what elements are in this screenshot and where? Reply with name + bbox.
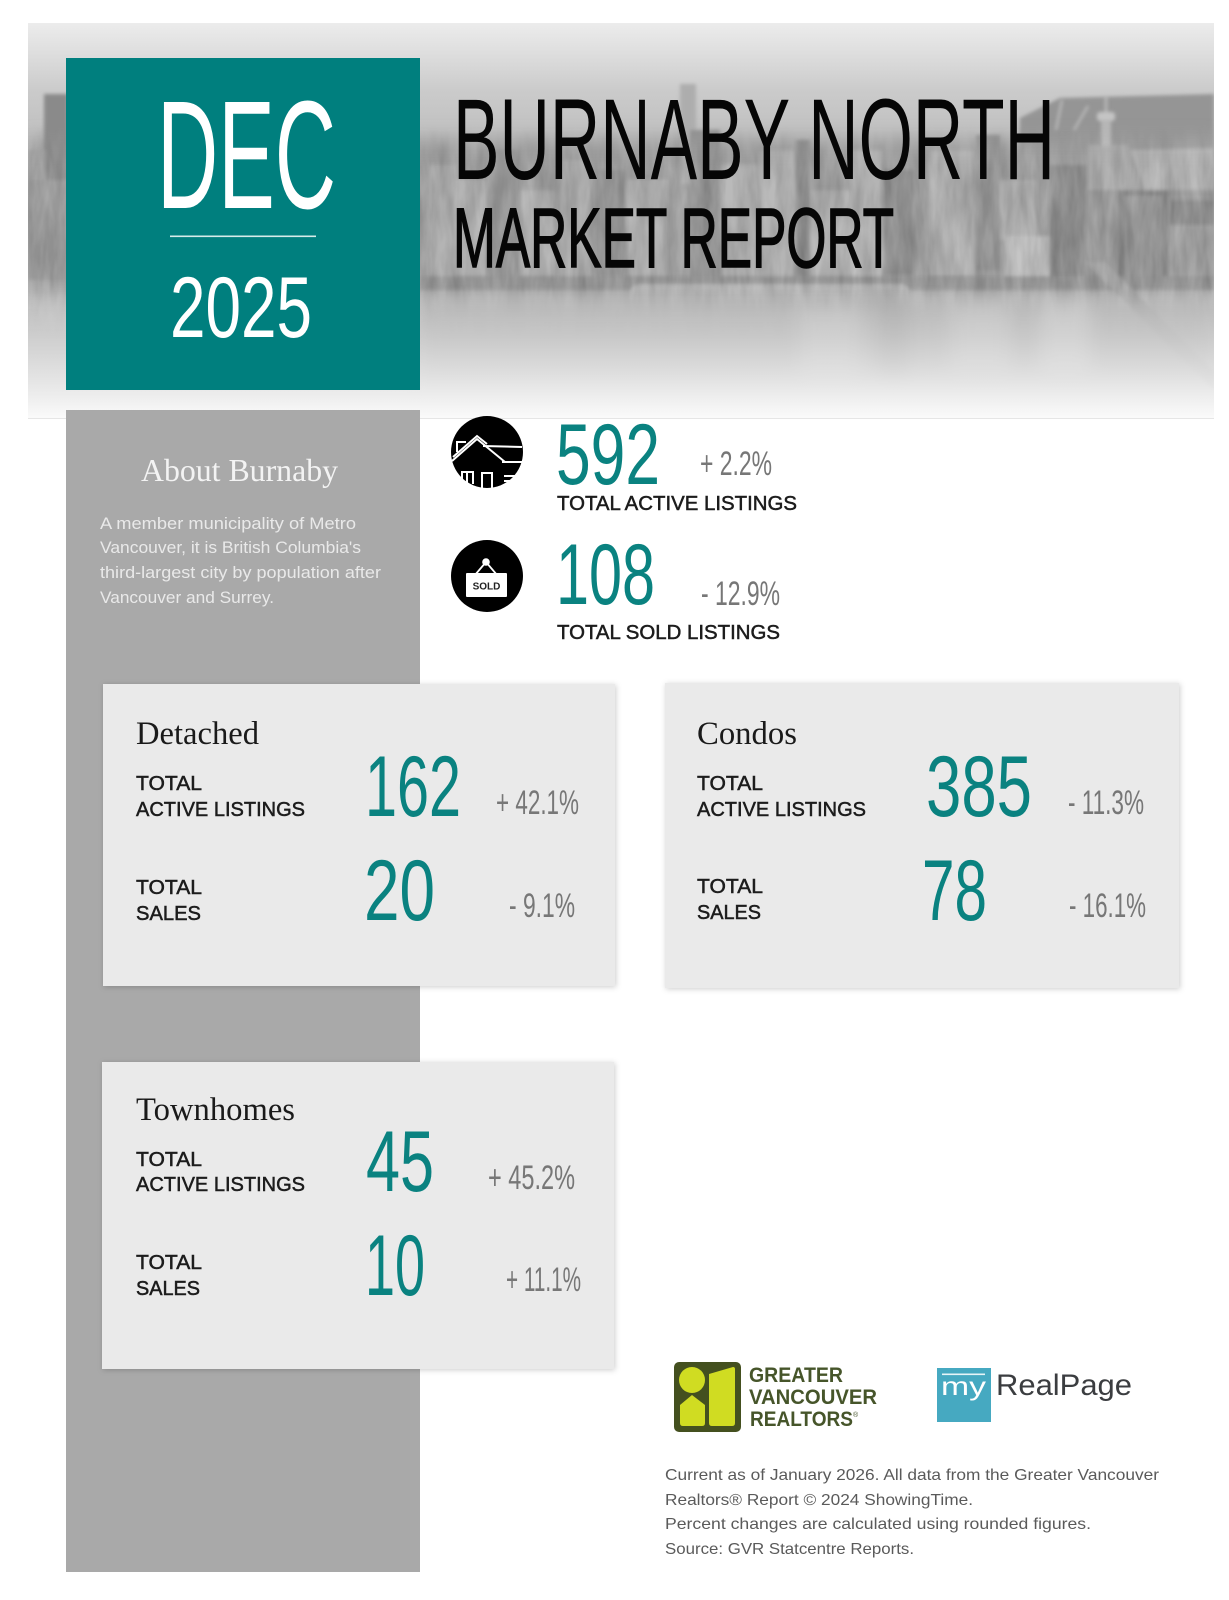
sidebar paragraph: Vancouver and Surrey.: [100, 589, 274, 607]
logo: myrealpage: [937, 1368, 1132, 1422]
footnote: Realtors® Report © 2024 ShowingTime.: [665, 1492, 973, 1509]
title line 2: MARKET REPORT: [453, 191, 894, 285]
icon: house: [451, 416, 523, 488]
header skyline photo banner: [28, 23, 1214, 419]
panel: townhomes: [102, 1062, 614, 1369]
icon: sold sign: SOLD: [473, 582, 500, 592]
condos sales change: - 16.1%: [1069, 887, 1146, 925]
condos listings label: [697, 773, 866, 821]
detached sales label: SALES: [136, 903, 201, 925]
townhomes listings label: [136, 1149, 305, 1196]
lookout tower: [1105, 96, 1107, 116]
detached sales label: [136, 877, 202, 925]
detached sales change: - 9.1%: [509, 887, 575, 925]
detached listings change: + 42.1%: [496, 784, 579, 822]
detached listings label: ACTIVE LISTINGS: [136, 799, 305, 821]
photo grain: [28, 140, 1214, 301]
footnote: Percent changes are calculated using rounded figures.: [665, 1516, 1091, 1533]
condos sales label: TOTAL: [697, 876, 763, 898]
sidebar paragraph: [100, 515, 382, 607]
city haze: [28, 140, 1214, 290]
condos heading: Condos: [697, 716, 797, 752]
month: DEC: [157, 69, 336, 241]
sidebar heading: About Burnaby: [141, 452, 338, 488]
sidebar paragraph: Vancouver, it is British Columbia's: [100, 539, 361, 557]
footnote: [665, 1467, 1160, 1558]
logo: myrealpage: my: [941, 1371, 986, 1401]
townhomes listings change: + 45.2%: [488, 1159, 575, 1197]
footnote: Source: GVR Statcentre Reports.: [665, 1541, 914, 1558]
left city mass: [48, 180, 66, 272]
sidebar paragraph: A member municipality of Metro: [100, 515, 356, 533]
value: 592: [556, 407, 660, 503]
detached listings label: TOTAL: [136, 773, 202, 795]
detached sales value: 20: [364, 843, 435, 939]
condos listings change: - 11.3%: [1068, 784, 1144, 822]
label: TOTAL SOLD LISTINGS: [557, 622, 780, 644]
townhomes sales label: TOTAL: [136, 1252, 202, 1274]
sidebar paragraph: third-largest city by population after: [100, 564, 382, 582]
townhomes listings value: 45: [366, 1114, 434, 1210]
logo: greater vancouver realtors: REALTORS: [750, 1408, 853, 1431]
condos listings label: TOTAL: [697, 773, 763, 795]
date panel: [66, 58, 420, 390]
townhomes sales label: [136, 1252, 202, 1300]
shoreline: [420, 276, 1214, 290]
detached heading: Detached: [136, 716, 259, 752]
stat: total sold listings: [556, 527, 780, 644]
panel: condos: [665, 683, 1179, 988]
condos listings value: 385: [926, 739, 1032, 835]
title: [453, 76, 1055, 285]
label: TOTAL ACTIVE LISTINGS: [557, 493, 797, 515]
panel: sidebar: [66, 410, 420, 1572]
marina: [630, 284, 910, 310]
townhomes listings label: TOTAL: [136, 1149, 202, 1171]
logo: greater vancouver realtors: GREATER: [749, 1364, 843, 1387]
logo: greater vancouver realtors: [674, 1362, 877, 1432]
value: 108: [556, 527, 655, 623]
icon: sold sign: [451, 540, 523, 612]
townhomes heading: Townhomes: [136, 1092, 295, 1128]
detached sales label: TOTAL: [136, 877, 202, 899]
condos listings label: ACTIVE LISTINGS: [697, 799, 866, 821]
detached listings label: [136, 773, 305, 821]
condos sales label: SALES: [697, 902, 761, 924]
city buildings: [28, 83, 1214, 305]
logo: myrealpage: RealPage: [996, 1369, 1132, 1402]
water reflections: [440, 300, 1189, 362]
mountain ridge: [1020, 94, 1214, 200]
condos sales value: 78: [922, 843, 987, 939]
year: 2025: [170, 260, 312, 356]
logo: greater vancouver realtors: ®: [853, 1411, 859, 1419]
townhomes sales value: 10: [365, 1218, 425, 1314]
change: + 2.2%: [700, 445, 772, 483]
stat: total active listings: [556, 407, 797, 515]
condos sales label: [697, 876, 763, 924]
townhomes listings label: ACTIVE LISTINGS: [136, 1174, 305, 1196]
townhomes sales label: SALES: [136, 1278, 200, 1300]
change: - 12.9%: [701, 575, 780, 613]
townhomes sales change: + 11.1%: [506, 1261, 581, 1299]
logo: greater vancouver realtors: VANCOUVER: [749, 1386, 877, 1409]
footnote: Current as of January 2026. All data from the Greater Vancouver: [665, 1467, 1160, 1484]
detached listings value: 162: [365, 739, 461, 835]
panel: detached: [103, 684, 615, 986]
